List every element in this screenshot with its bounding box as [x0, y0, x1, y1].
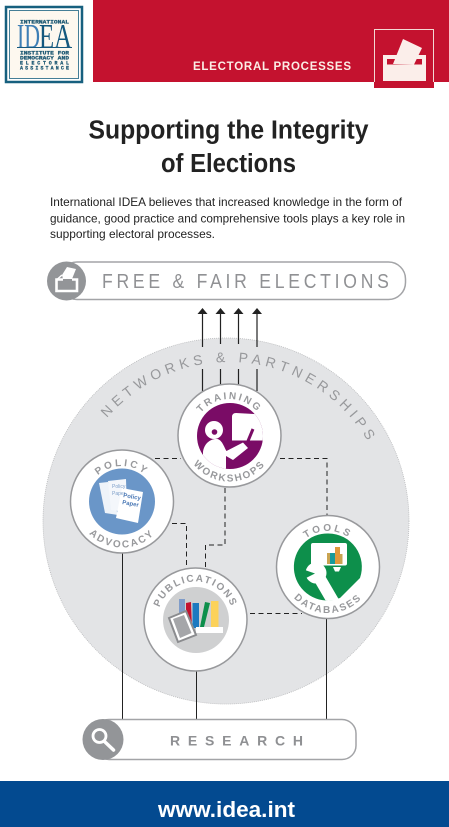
intro text block	[50, 195, 405, 241]
policy arc label: POLICY	[94, 459, 148, 475]
icon: ballot box	[374, 29, 434, 88]
website address: www.idea.int	[157, 797, 296, 822]
icon: screen and spanner	[294, 533, 362, 603]
logo: International IDEA: EA	[39, 17, 73, 56]
logo: International IDEA: INSTITUTE FOR	[20, 50, 69, 56]
banner label: ELECTORAL PROCESSES	[193, 61, 351, 73]
arrows to free and fair elections	[198, 308, 262, 391]
tools arc label: TOOLS	[302, 524, 350, 537]
logo: International IDEA: ELECTORAL	[20, 60, 69, 66]
solid connectors to research	[122, 553, 326, 720]
icon: trainer at board	[197, 403, 263, 469]
logo: International IDEA: ASSISTANCE	[20, 66, 69, 72]
icon: policy papers: Paper	[122, 500, 140, 509]
logo: International IDEA: DEMOCRACY AND	[20, 56, 69, 62]
advocacy arc label: ADVOCACY	[89, 530, 152, 548]
title: Supporting the Integrity	[88, 116, 369, 144]
panel: publications	[143, 567, 248, 672]
intro text block: International IDEA believes that increased knowledge in the form of	[50, 195, 403, 209]
dashed connectors	[155, 458, 327, 614]
intro text block: supporting electoral processes.	[50, 227, 215, 241]
intro text block: guidance, good practice and comprehensive tools plays a key role in	[50, 212, 405, 226]
icon: magnifying glass	[82, 719, 124, 760]
panel: training workshops	[177, 383, 282, 488]
bar label: FREE & FAIR ELECTIONS	[102, 270, 389, 292]
bar label: RESEARCH	[170, 732, 303, 748]
icon: policy papers	[89, 468, 155, 534]
logo: International IDEA: ID	[17, 17, 40, 56]
logo: International IDEA: INTERNATIONAL	[20, 20, 69, 26]
icon: policy papers: Policy	[123, 493, 142, 502]
training arc label: TRAINING	[196, 392, 260, 411]
logo: International IDEA	[6, 7, 82, 82]
icon: policy papers: Policy	[112, 484, 126, 490]
workshops arc label: WORKSHOPS	[194, 460, 264, 482]
title: of Elections	[161, 150, 296, 178]
panel: tools and databases	[276, 514, 380, 620]
networks and partnerships label: NETWORKS & PARTNERSHIPS	[100, 352, 374, 440]
icon: books and tablet	[163, 587, 229, 653]
databases arc label: DATABASES	[294, 593, 360, 613]
panel: research bar	[82, 719, 356, 760]
panel: networks and partnerships circle	[43, 338, 409, 704]
icon: ballot box in grey circle	[47, 262, 86, 300]
footer band	[0, 781, 449, 827]
title	[88, 116, 369, 178]
panel: policy advocacy	[70, 449, 174, 554]
icon: policy papers: Paper	[112, 491, 126, 497]
publications arc label: PUBLICATIONS	[153, 574, 236, 607]
header banner	[93, 0, 449, 82]
panel: free and fair elections bar	[47, 262, 406, 300]
